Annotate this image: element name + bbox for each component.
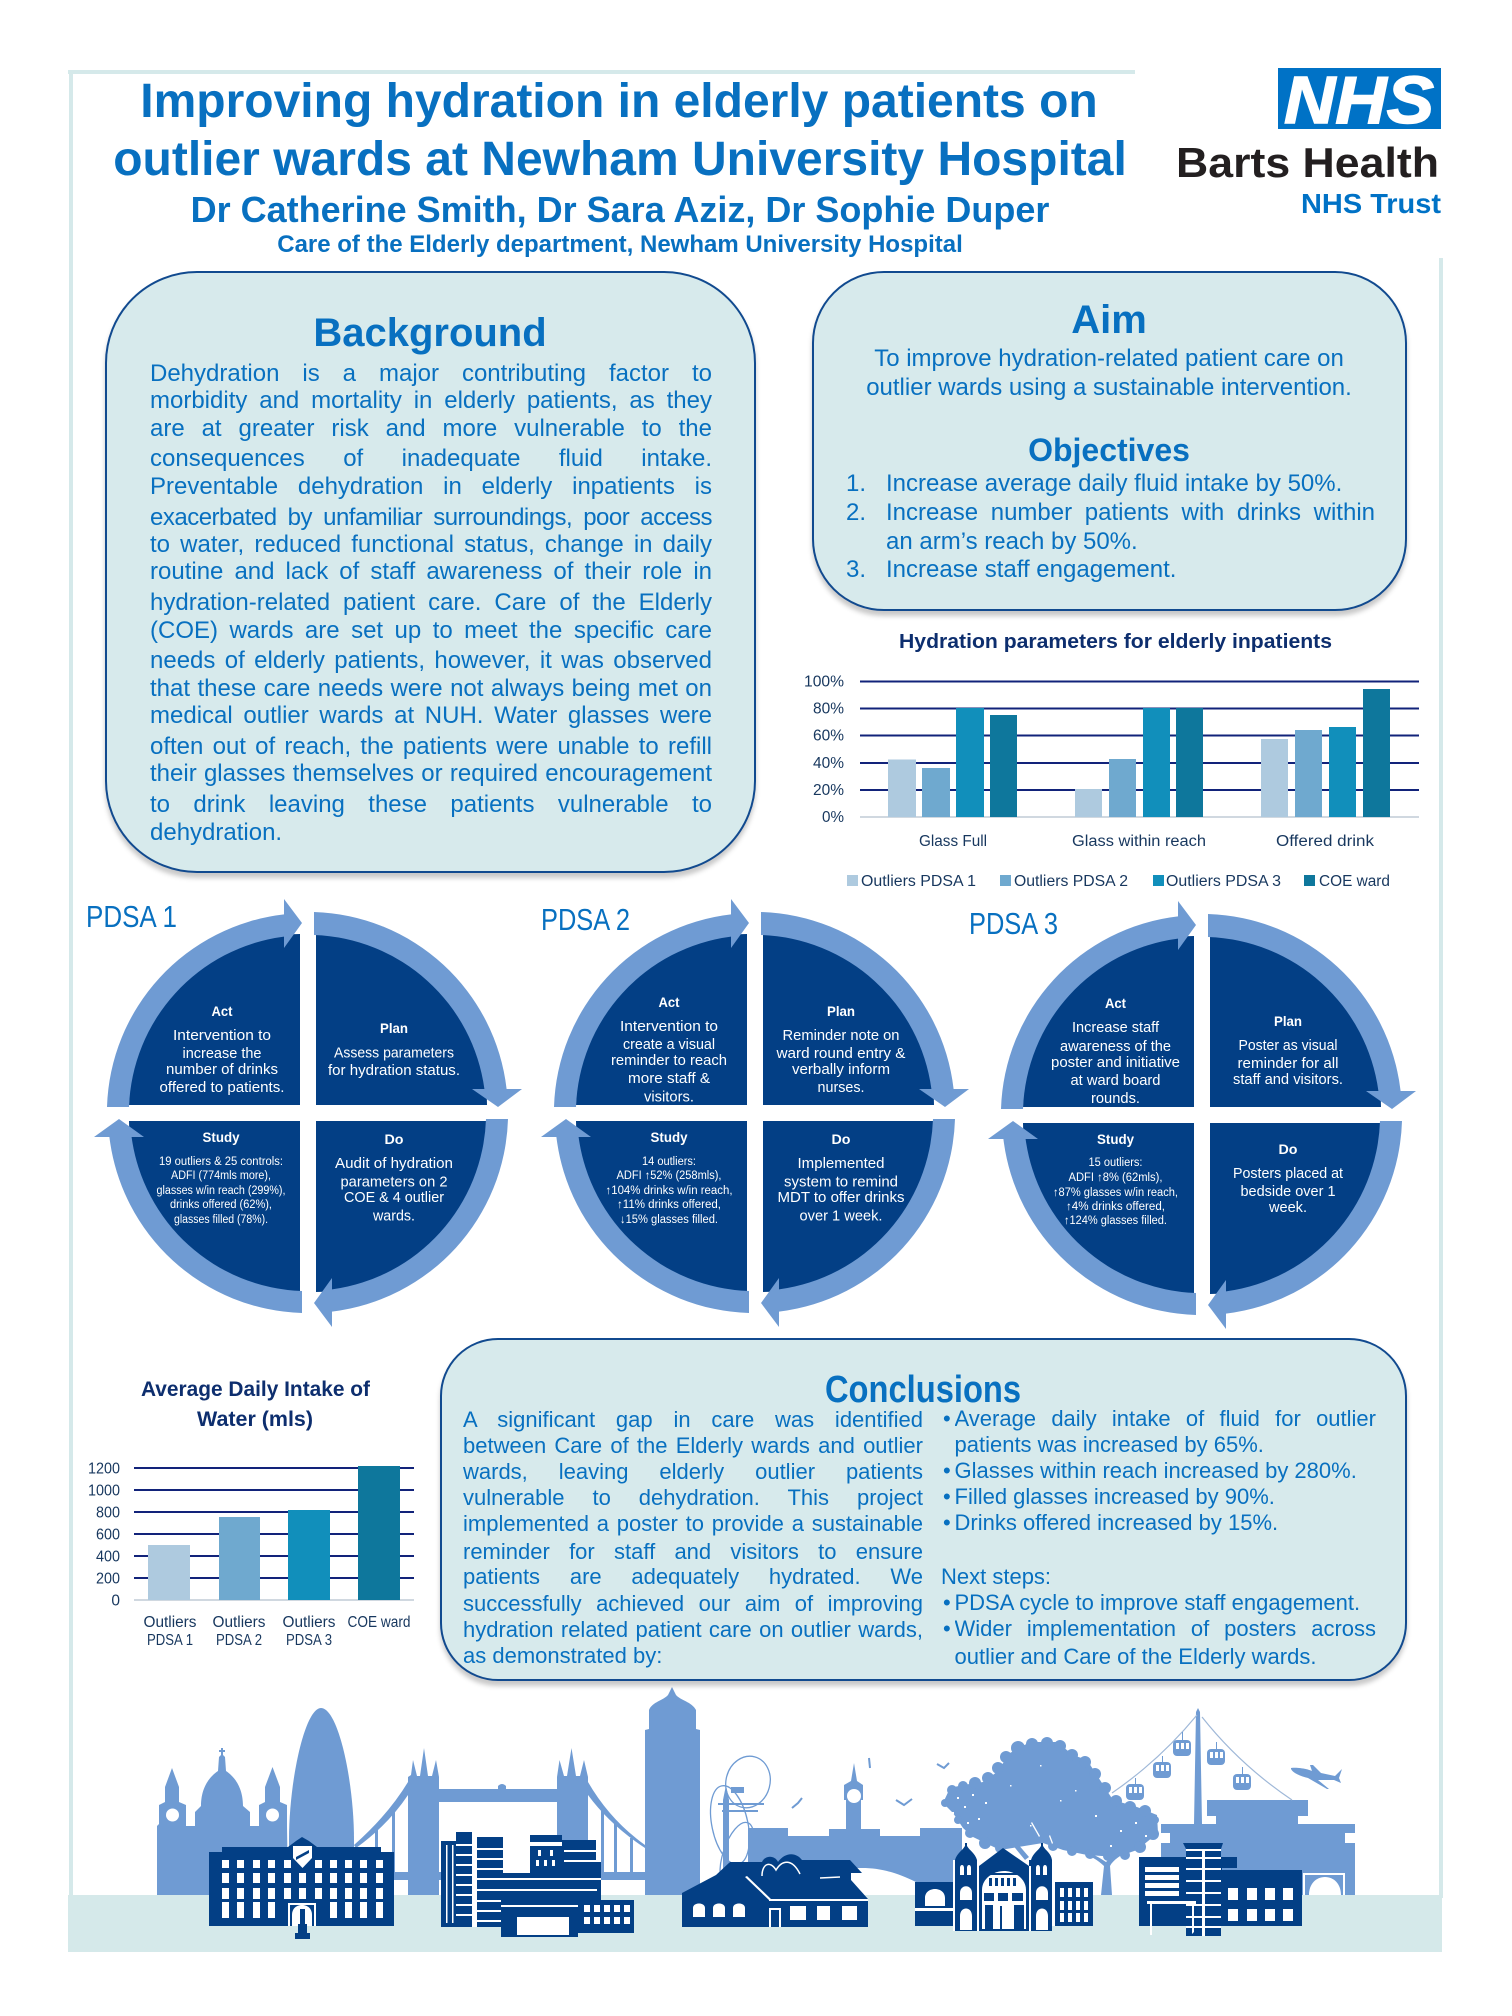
chart title: Hydration parameters for elderly inpatients — [899, 631, 1332, 653]
PDSA 3 cycle: poster and initiative — [1051, 1055, 1180, 1071]
ground band — [68, 1895, 1442, 1952]
PDSA 2 cycle: Study — [650, 1129, 688, 1145]
PDSA 1 cycle: number of drinks — [166, 1062, 278, 1078]
PDSA 1 cycle: wards. — [372, 1208, 415, 1224]
conclusions left column — [463, 1407, 923, 1668]
tower bridge — [354, 1748, 645, 1895]
background text: medical outlier wards at NUH. Water glasses were — [150, 702, 712, 729]
axis labels: Glass Full — [919, 833, 987, 850]
PDSA 1 cycle: Audit of hydration — [335, 1156, 453, 1172]
background text: to drink leaving these patients vulnerable to — [150, 791, 712, 818]
PDSA 2 cycle: ward round entry & — [775, 1046, 906, 1062]
background text: routine and lack of staff awareness of their role in — [150, 558, 712, 585]
axis labels: Glass within reach — [1072, 833, 1206, 850]
PDSA 2 cycle: visitors. — [644, 1090, 694, 1106]
panel: aim and objectives — [812, 271, 1407, 611]
PDSA 2 cycle: ADFI ↑52% (258mls), — [616, 1170, 722, 1182]
objectives list: 1. — [846, 470, 866, 497]
objectives list: Increase number patients with drinks within — [886, 498, 1375, 526]
aim text — [866, 345, 1352, 400]
conclusions left column: hydration related patient care on outlier wards, — [463, 1617, 923, 1642]
cable car lines and gondolas — [1112, 1715, 1292, 1800]
PDSA 2 cycle: verbally inform — [792, 1062, 890, 1078]
PDSA 1 cycle: Intervention to — [173, 1028, 271, 1044]
PDSA 2 cycle: Reminder note on — [782, 1028, 900, 1044]
tree — [941, 1737, 1159, 1895]
logo: NHS Barts Health — [1176, 63, 1441, 219]
PDSA 3 cycle: staff and visitors. — [1233, 1072, 1343, 1088]
objectives list — [846, 470, 1375, 583]
conclusions left column: wards, leaving elderly outlier patients — [463, 1459, 923, 1484]
conclusions right column: Wider implementation of posters across — [954, 1616, 1376, 1641]
conclusions right column: Glasses within reach increased by 280%. — [954, 1458, 1357, 1483]
conclusions heading: Conclusions — [825, 1369, 1021, 1411]
PDSA 1 cycle: 19 outliers & 25 controls: — [159, 1156, 283, 1168]
PDSA 2 cycle: 14 outliers: — [642, 1156, 696, 1168]
PDSA 2 cycle: MDT to offer drinks — [778, 1190, 904, 1206]
PDSA 2 cycle: ↑11% drinks offered, — [617, 1199, 721, 1211]
PDSA 1 cycle: offered to patients. — [160, 1080, 284, 1096]
background text: (COE) wards are set up to meet the specific care — [150, 617, 712, 644]
conclusions right column: • — [943, 1484, 951, 1509]
conclusions left column: between Care of the Elderly wards and outlier — [463, 1433, 923, 1458]
background text — [150, 360, 712, 846]
axis labels: 100% — [804, 674, 844, 690]
PDSA 3 cycle: awareness of the — [1060, 1039, 1171, 1055]
conclusions right column: patients was increased by 65%. — [954, 1432, 1264, 1457]
title line 2: outlier wards at Newham University Hospital — [113, 133, 1127, 186]
PDSA 3 cycle: ↑124% glasses filled. — [1064, 1215, 1167, 1227]
axis labels: 400 — [96, 1548, 120, 1566]
birds — [792, 1758, 949, 1808]
axis labels: COE ward — [348, 1614, 410, 1631]
axis labels: 200 — [96, 1570, 120, 1588]
PDSA 3 cycle — [969, 901, 1416, 1329]
axis labels: Outliers — [212, 1614, 266, 1631]
axis labels: 0% — [822, 809, 844, 826]
background text: Preventable dehydration in elderly inpatients is — [150, 473, 712, 500]
PDSA 2 cycle: Plan — [827, 1003, 855, 1019]
canary wharf tower — [645, 1687, 700, 1895]
conclusions right column: • — [943, 1406, 951, 1431]
conclusions right column: outlier and Care of the Elderly wards. — [954, 1644, 1316, 1669]
conclusions left column: A significant gap in care was identified — [463, 1407, 923, 1432]
PDSA 3 cycle: Study — [1097, 1131, 1134, 1147]
background text: their glasses themselves or required encouragement — [150, 760, 712, 787]
PDSA 3 cycle: Act — [1105, 995, 1126, 1011]
axis labels: 800 — [96, 1504, 120, 1522]
department: Care of the Elderly department, Newham University Hospital — [277, 231, 963, 258]
PDSA 3 cycle: reminder for all — [1238, 1056, 1338, 1072]
chart title: Average Daily Intake of — [141, 1378, 371, 1401]
chart title — [141, 1378, 371, 1431]
chapel building — [915, 1843, 1093, 1931]
PDSA 1 cycle: ADFI (774mls more), — [171, 1170, 271, 1182]
objectives list: an arm’s reach by 50%. — [886, 528, 1138, 555]
aim text: To improve hydration-related patient care on — [874, 345, 1344, 372]
title line 1: Improving hydration in elderly patients on — [140, 75, 1098, 128]
PDSA 1 cycle: Study — [202, 1129, 240, 1145]
logo: NHS Barts Health: NHS Trust — [1301, 188, 1441, 219]
PDSA 2 heading: PDSA 2 — [541, 902, 630, 937]
background text: consequences of inadequate fluid intake. — [150, 445, 712, 472]
panel: background — [105, 271, 756, 873]
background text: Dehydration is a major contributing factor to — [150, 360, 712, 387]
PDSA 3 cycle: at ward board — [1070, 1073, 1160, 1089]
PDSA 1 cycle: Act — [212, 1003, 233, 1019]
objectives list: 3. — [846, 556, 866, 583]
town hall building — [682, 1854, 868, 1927]
PDSA 2 cycle: nurses. — [818, 1080, 864, 1096]
PDSA 2 cycle: reminder to reach — [611, 1053, 727, 1069]
background text: hydration-related patient care. Care of the Elderly — [150, 589, 712, 616]
conclusions left column: implemented a poster to provide a sustainable — [463, 1511, 923, 1536]
chart: hydration parameters — [804, 631, 1419, 890]
PDSA 1 cycle: parameters on 2 — [340, 1174, 448, 1190]
authors: Dr Catherine Smith, Dr Sara Aziz, Dr Sophie Duper — [191, 189, 1049, 230]
axis labels: 80% — [813, 700, 844, 718]
PDSA 2 cycle: system to remind — [784, 1174, 898, 1190]
conclusions right column: Next steps: — [941, 1564, 1051, 1589]
conclusions left column: patients are adequately hydrated. We — [463, 1564, 923, 1589]
PDSA 1 cycle: Assess parameters — [334, 1046, 454, 1062]
panel: conclusions — [440, 1338, 1407, 1681]
PDSA 2 cycle: over 1 week. — [800, 1208, 882, 1224]
chart title: Water (mls) — [197, 1408, 313, 1431]
axis labels: PDSA 1 — [147, 1632, 193, 1649]
PDSA 3 heading: PDSA 3 — [969, 906, 1058, 941]
conclusions right column: Average daily intake of fluid for outlier — [954, 1406, 1376, 1431]
city wall with clock tower — [748, 1763, 962, 1882]
PDSA 3 cycle: Do — [1278, 1141, 1298, 1157]
axis labels: Outliers — [144, 1614, 197, 1631]
gherkin tower — [289, 1708, 354, 1895]
axis labels — [88, 1460, 410, 1649]
conclusions right column: • — [943, 1458, 951, 1483]
axis labels: 600 — [96, 1526, 120, 1544]
cable car building — [1161, 1708, 1355, 1895]
background text: exacerbated by unfamiliar surroundings, poor access — [150, 504, 712, 531]
conclusions right column: Drinks offered increased by 15%. — [954, 1510, 1278, 1535]
PDSA 2 cycle: ↑104% drinks w/in reach, — [606, 1185, 732, 1197]
legend: Outliers PDSA 2 — [1014, 873, 1128, 890]
background text: needs of elderly patients, however, it was observed — [150, 647, 712, 674]
conclusions left column: reminder for staff and visitors to ensure — [463, 1539, 923, 1564]
PDSA 2 cycle: Do — [832, 1131, 850, 1147]
background text: dehydration. — [150, 819, 282, 846]
dark foreground buildings — [209, 1832, 1302, 1939]
PDSA 2 cycle: Implemented — [798, 1156, 884, 1172]
PDSA 3 cycle: Plan — [1274, 1013, 1302, 1029]
objectives list: Increase average daily fluid intake by 50%. — [886, 470, 1342, 497]
conclusions right column: • — [943, 1590, 951, 1615]
conclusions left column: as demonstrated by: — [463, 1643, 662, 1668]
axis labels: 20% — [813, 782, 844, 799]
PDSA 1 cycle: Plan — [380, 1020, 408, 1036]
conclusions right column — [941, 1406, 1376, 1669]
PDSA 2 cycle: create a visual — [623, 1037, 715, 1053]
PDSA 3 cycle: ↑4% drinks offered, — [1066, 1201, 1165, 1213]
aim heading: Aim — [1071, 298, 1147, 342]
PDSA 1 cycle: Do — [384, 1131, 404, 1147]
conclusions right column: PDSA cycle to improve staff engagement. — [954, 1590, 1360, 1615]
PDSA 3 cycle: Increase staff — [1072, 1020, 1160, 1036]
axis labels: PDSA 2 — [216, 1632, 262, 1649]
axis labels: Outliers — [282, 1614, 336, 1631]
logo: NHS Barts Health: NHS — [1284, 63, 1434, 138]
aeroplane — [1291, 1765, 1342, 1789]
axis labels — [804, 674, 1374, 850]
axis labels: 0 — [111, 1592, 120, 1610]
conclusions right column: Filled glasses increased by 90%. — [954, 1484, 1275, 1509]
PDSA 3 cycle: Posters placed at — [1233, 1166, 1343, 1182]
PDSA 1 heading: PDSA 1 — [86, 899, 177, 934]
cathedral — [157, 1748, 288, 1895]
PDSA 3 cycle: ADFI ↑8% (62mls), — [1068, 1172, 1162, 1184]
legend: Outliers PDSA 1 — [861, 873, 976, 890]
logo: NHS Barts Health: Barts Health — [1176, 139, 1439, 186]
axis labels: 60% — [813, 728, 844, 744]
hospital building — [209, 1837, 394, 1939]
PDSA 2 cycle: Intervention to — [620, 1019, 718, 1035]
background text: to water, reduced functional status, change in daily — [150, 531, 712, 558]
PDSA 1 cycle: for hydration status. — [328, 1063, 460, 1079]
legend: COE ward — [1319, 873, 1390, 890]
PDSA 3 cycle: bedside over 1 — [1240, 1184, 1336, 1200]
legend: Outliers PDSA 3 — [1166, 873, 1281, 890]
PDSA 1 cycle: increase the — [182, 1046, 262, 1062]
modern tower building — [1139, 1843, 1302, 1936]
PDSA 1 cycle: COE & 4 outlier — [344, 1190, 444, 1206]
conclusions right column: • — [943, 1510, 951, 1535]
light skyline silhouettes — [157, 1687, 1355, 1895]
PDSA 2 cycle: ↓15% glasses filled. — [620, 1214, 718, 1226]
conclusions left column: vulnerable to dehydration. This project — [463, 1485, 923, 1510]
PDSA 2 cycle: more staff & — [628, 1071, 710, 1087]
PDSA 2 cycle — [541, 899, 969, 1327]
conclusions left column: successfully achieved our aim of improving — [463, 1591, 923, 1616]
orbit sculpture — [704, 1751, 776, 1892]
PDSA 3 cycle: ↑87% glasses w/in reach, — [1053, 1187, 1178, 1199]
PDSA 1 cycle — [86, 899, 522, 1327]
PDSA 1 cycle: drinks offered (62%), — [170, 1199, 272, 1211]
PDSA 1 cycle: glasses filled (78%). — [174, 1214, 268, 1226]
PDSA 1 cycle: glasses w/in reach (299%), — [156, 1185, 286, 1197]
skyline illustration — [68, 1687, 1442, 1952]
axis labels: 40% — [813, 755, 844, 772]
objectives list: Increase staff engagement. — [886, 556, 1176, 583]
axis labels: 1000 — [88, 1482, 120, 1500]
axis labels: PDSA 3 — [286, 1632, 332, 1649]
background heading: Background — [313, 311, 547, 355]
bars — [148, 1466, 400, 1600]
axis labels: 1200 — [88, 1460, 120, 1478]
PDSA 3 cycle: Poster as visual — [1238, 1038, 1338, 1054]
objectives list: 2. — [846, 498, 866, 526]
aim text: outlier wards using a sustainable intervention. — [866, 374, 1352, 400]
title — [113, 75, 1127, 258]
conclusions right column: • — [943, 1616, 951, 1641]
chart: average daily intake of water — [88, 1378, 414, 1649]
bars — [888, 689, 1390, 817]
axis labels: Offered drink — [1276, 833, 1374, 850]
objectives heading: Objectives — [1028, 432, 1190, 468]
background text: morbidity and mortality in elderly patients, as they — [150, 387, 712, 414]
PDSA 3 cycle: 15 outliers: — [1088, 1157, 1142, 1169]
background text: are at greater risk and more vulnerable to the — [150, 415, 712, 442]
PDSA 3 cycle: rounds. — [1091, 1091, 1140, 1107]
background text: that these care needs were not always being met on — [150, 675, 712, 702]
background text: often out of reach, the patients were unable to refill — [150, 733, 712, 760]
PDSA 2 cycle: Act — [658, 994, 680, 1010]
legend — [847, 873, 1390, 890]
tower block complex — [441, 1832, 634, 1937]
PDSA 3 cycle: week. — [1268, 1200, 1307, 1216]
